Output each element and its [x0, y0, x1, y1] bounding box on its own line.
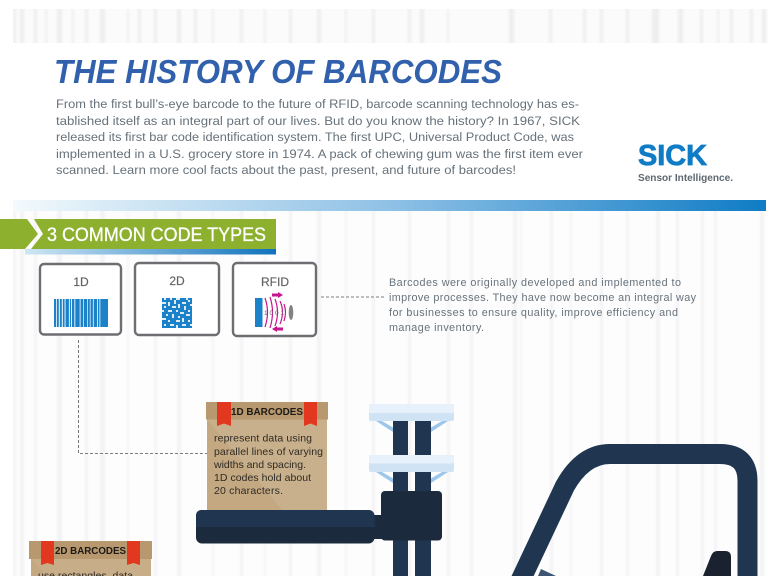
intro text block — [56, 97, 583, 177]
intro text block: scanned. Learn more cool facts about the past, present, and future of barcodes! — [56, 163, 516, 177]
intro text block: released its first bar code identification system. The first UPC, Universal Product Code, was — [56, 130, 574, 144]
note text — [389, 277, 697, 334]
card: 2D — [135, 263, 219, 335]
icon: RFID waves: 0 — [275, 310, 279, 317]
card: RFID — [233, 263, 316, 336]
decorative barcode band, top — [13, 9, 766, 43]
1D barcodes box: widths and spacing. — [213, 459, 306, 471]
note text: improve processes. They have now become an integral way — [389, 292, 697, 304]
card: 1D — [40, 264, 121, 334]
icon: RFID waves: 1 — [280, 310, 284, 317]
intro text block: tablished itself as an integral part of our lives. But do you know the history? In 1967, SICK — [56, 114, 581, 128]
1D barcodes box — [206, 402, 328, 511]
SICK logo: SICK — [638, 140, 707, 172]
icon: 2D matrix code — [162, 298, 192, 328]
1D barcodes box: parallel lines of varying — [214, 446, 323, 458]
forklift frame — [516, 454, 748, 576]
1D barcodes box: 20 characters. — [214, 485, 283, 497]
1D barcodes box: 1D codes hold about — [214, 472, 311, 484]
machine: conveyor belt — [196, 510, 384, 544]
icon: RFID waves: 0 — [270, 310, 274, 317]
gradient divider bar — [13, 200, 766, 211]
section heading banner: 3 COMMON CODE TYPES — [47, 225, 266, 246]
icon: 1D barcode — [54, 299, 108, 327]
intro text block: From the first bull’s-eye barcode to the future of RFID, barcode scanning technology has es- — [56, 97, 579, 111]
SICK logo: Sensor Intelligence. — [638, 172, 733, 184]
title: THE HISTORY OF BARCODES — [54, 54, 502, 91]
dashed connector: RFID to note — [321, 296, 385, 298]
note text: for businesses to ensure quality, improve efficiency and — [389, 307, 678, 319]
intro text block: implemented in a U.S. grocery store in 1974. A pack of chewing gum was the first item ever — [56, 147, 583, 161]
section heading banner — [0, 219, 276, 254]
note text: Barcodes were originally developed and implemented to — [389, 277, 681, 289]
icon: RFID waves: 1 — [264, 310, 268, 317]
card: RFID: RFID — [261, 275, 289, 289]
card: 2D: 2D — [169, 274, 185, 288]
2D barcodes box: 2D BARCODES — [55, 545, 126, 557]
2D barcodes box — [29, 541, 152, 576]
SICK logo — [638, 140, 733, 184]
machine: scanner stand — [369, 404, 454, 576]
1D barcodes box: 1D BARCODES — [231, 406, 303, 418]
note text: manage inventory. — [389, 322, 484, 334]
icon: RFID waves — [255, 292, 293, 332]
dashed connector: 1D to box — [78, 340, 207, 454]
1D barcodes box: represent data using — [214, 432, 312, 444]
decorative barcode background, lower — [13, 200, 768, 576]
card: 1D: 1D — [73, 275, 89, 289]
